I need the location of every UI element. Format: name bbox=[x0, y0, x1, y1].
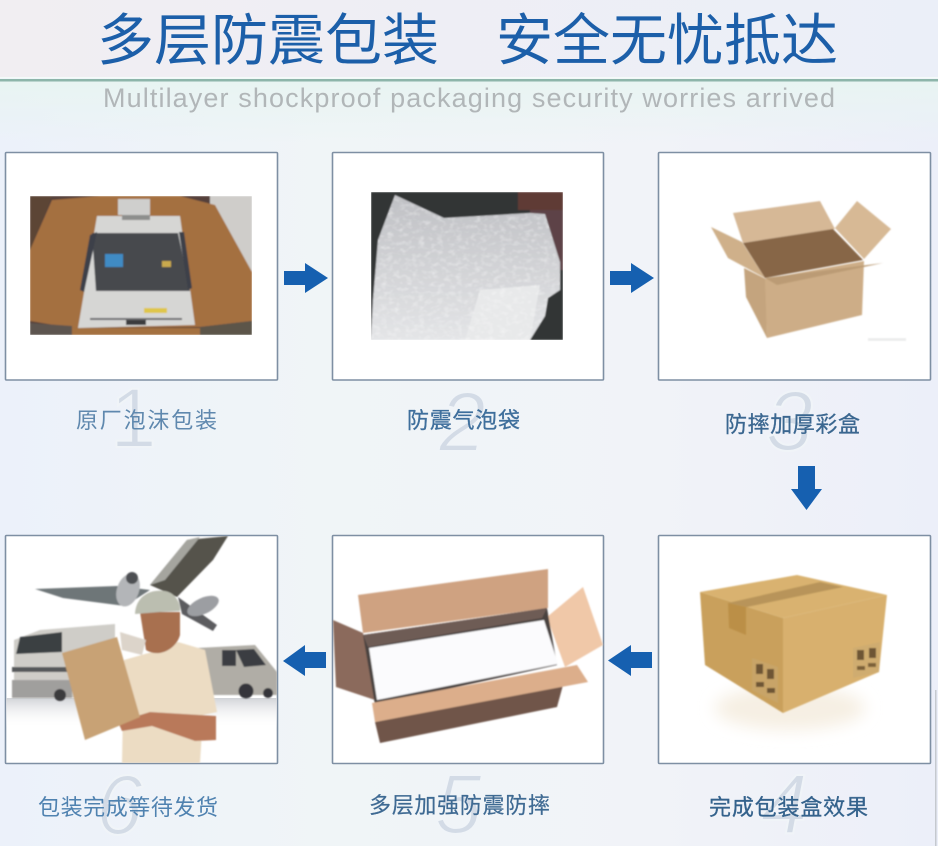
panel 4: finished carton bbox=[658, 536, 930, 764]
ghost numeral 1: 1 bbox=[110, 371, 157, 465]
english subtitle: Multilayer shockproof packaging security worries arrived bbox=[103, 83, 835, 113]
panel 2: shockproof bubble bag bbox=[332, 152, 604, 380]
label 2: 防震气泡袋 bbox=[407, 408, 520, 433]
ghost numeral 2: 2 bbox=[438, 375, 486, 469]
panel 3: reinforced carton bbox=[658, 152, 930, 380]
airplane bbox=[35, 536, 228, 631]
arrow 5 to 6 bbox=[283, 645, 326, 676]
label 3: 防摔加厚彩盒 bbox=[725, 412, 860, 437]
arrow 3 to 4 bbox=[791, 466, 822, 510]
van bbox=[197, 645, 277, 698]
delivery man bbox=[118, 591, 217, 763]
carton held bbox=[62, 637, 140, 740]
label 5: 多层加强防震防摔 bbox=[369, 793, 550, 818]
panel 6: awaiting shipment bbox=[6, 536, 278, 764]
arrow 2 to 3 bbox=[610, 263, 654, 293]
header title: 多层防震包装 bbox=[97, 9, 439, 72]
truck bbox=[12, 624, 115, 701]
label 1: 原厂泡沫包装 bbox=[76, 408, 217, 433]
label 4: 完成包装盒效果 bbox=[709, 795, 868, 820]
ghost numeral 3: 3 bbox=[766, 374, 813, 468]
arrow 1 to 2 bbox=[284, 263, 328, 293]
panel 1: factory foam packaging bbox=[6, 152, 278, 380]
label 6: 包装完成等待发货 bbox=[38, 795, 218, 820]
arrow 4 to 5 bbox=[608, 645, 652, 676]
panel 5: layered carton bbox=[332, 536, 604, 764]
header title bbox=[97, 9, 838, 72]
header title: 安全无忧抵达 bbox=[496, 9, 838, 72]
